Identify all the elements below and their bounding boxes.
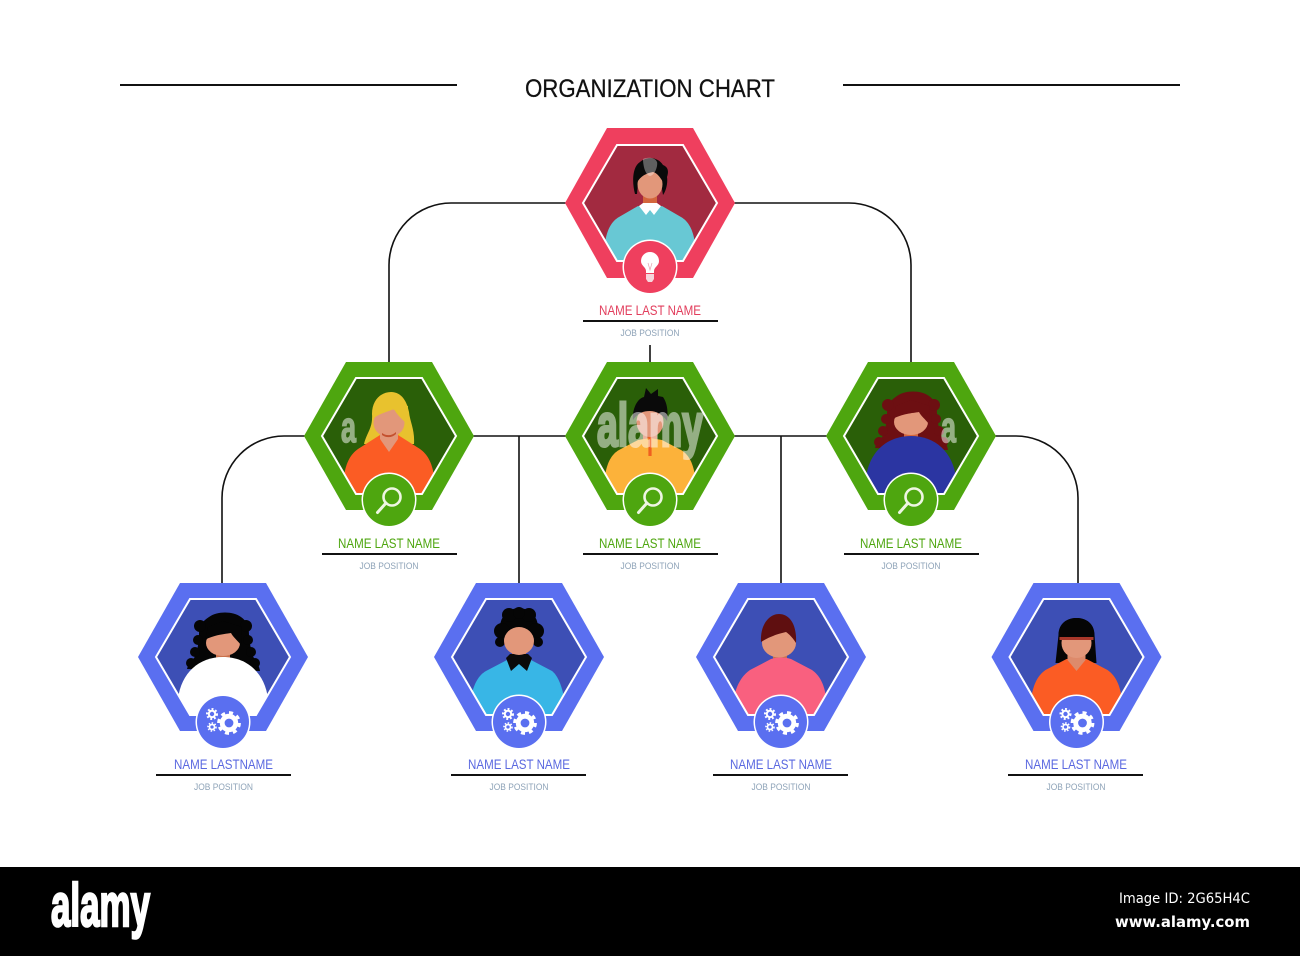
- inner hexagon: [844, 378, 978, 494]
- hexagon frame: [565, 362, 735, 510]
- portrait: [605, 388, 695, 496]
- node: staff 1: [138, 583, 308, 750]
- portrait: [734, 614, 826, 717]
- icon: light bulb badge: [622, 240, 678, 294]
- node: staff 2: [434, 583, 604, 750]
- watermark: a: [341, 403, 356, 452]
- label: manager right: [844, 536, 979, 571]
- portrait: [605, 158, 695, 263]
- label: staff 1: NAME LASTNAME: [174, 757, 273, 772]
- label: manager right: NAME LAST NAME: [860, 536, 962, 551]
- watermark: [341, 392, 956, 459]
- label: staff 1: [156, 757, 291, 792]
- label: staff 3: NAME LAST NAME: [730, 757, 832, 772]
- label: staff 3: [713, 757, 848, 792]
- label: staff 4: [1008, 757, 1143, 792]
- website: www.alamy.com: [1115, 913, 1250, 931]
- hexagon frame: [696, 583, 866, 731]
- label: staff 2: [451, 757, 586, 792]
- hexagon frame: [138, 583, 308, 731]
- footer logo: alamy: [51, 872, 150, 939]
- watermark: a: [941, 403, 956, 452]
- image id: Image ID: 2G65H4C: [1119, 891, 1250, 907]
- portrait: [471, 607, 564, 717]
- label: staff 4: NAME LAST NAME: [1025, 757, 1127, 772]
- inner hexagon: [156, 599, 290, 715]
- inner hexagon: [583, 145, 717, 261]
- connector lines: [222, 203, 1078, 584]
- portrait: [1032, 618, 1122, 717]
- label: manager centre: JOB POSITION: [620, 561, 680, 571]
- portrait: [178, 612, 268, 717]
- title: ORGANIZATION CHART: [525, 75, 775, 103]
- label: manager centre: [583, 536, 718, 571]
- hexagon frame: [992, 583, 1162, 731]
- label: staff 1: JOB POSITION: [194, 782, 253, 792]
- icon: gears badge: [1049, 694, 1104, 750]
- inner hexagon: [322, 378, 456, 494]
- hexagon frame: [826, 362, 996, 510]
- icon: magnifier badge: [362, 472, 416, 528]
- inner hexagon: [1010, 599, 1144, 715]
- node: top executive: [565, 128, 735, 294]
- node: manager centre: [565, 362, 735, 528]
- inner hexagon: [452, 599, 586, 715]
- inner hexagon: [583, 378, 717, 494]
- icon: magnifier badge: [884, 472, 938, 528]
- label: top executive: NAME LAST NAME: [599, 303, 701, 318]
- label: manager left: JOB POSITION: [360, 561, 418, 571]
- label: manager centre: NAME LAST NAME: [599, 536, 701, 551]
- icon: gears badge: [754, 694, 808, 750]
- node: staff 3: [696, 583, 866, 750]
- hexagon frame: [565, 128, 735, 278]
- icon: gears badge: [492, 694, 546, 750]
- footer bar: [0, 867, 1300, 956]
- label: manager right: JOB POSITION: [882, 561, 940, 571]
- label: staff 3: JOB POSITION: [752, 782, 810, 792]
- label: staff 4: JOB POSITION: [1046, 782, 1106, 792]
- watermark: alamy: [597, 392, 703, 459]
- label: staff 2: JOB POSITION: [490, 782, 548, 792]
- icon: magnifier badge: [622, 472, 678, 528]
- portrait: [866, 392, 956, 496]
- node: manager right: [826, 362, 996, 528]
- node: manager left: [304, 362, 474, 528]
- inner hexagon: [714, 599, 848, 715]
- hexagon frame: [304, 362, 474, 510]
- portrait: [344, 392, 434, 496]
- label: top executive: JOB POSITION: [620, 328, 680, 338]
- icon: gears badge: [196, 694, 250, 750]
- hexagon frame: [434, 583, 604, 731]
- label: manager left: [322, 536, 457, 571]
- node: staff 4: [992, 583, 1162, 750]
- label: manager left: NAME LAST NAME: [338, 536, 440, 551]
- label: staff 2: NAME LAST NAME: [468, 757, 570, 772]
- label: top executive: [583, 303, 718, 338]
